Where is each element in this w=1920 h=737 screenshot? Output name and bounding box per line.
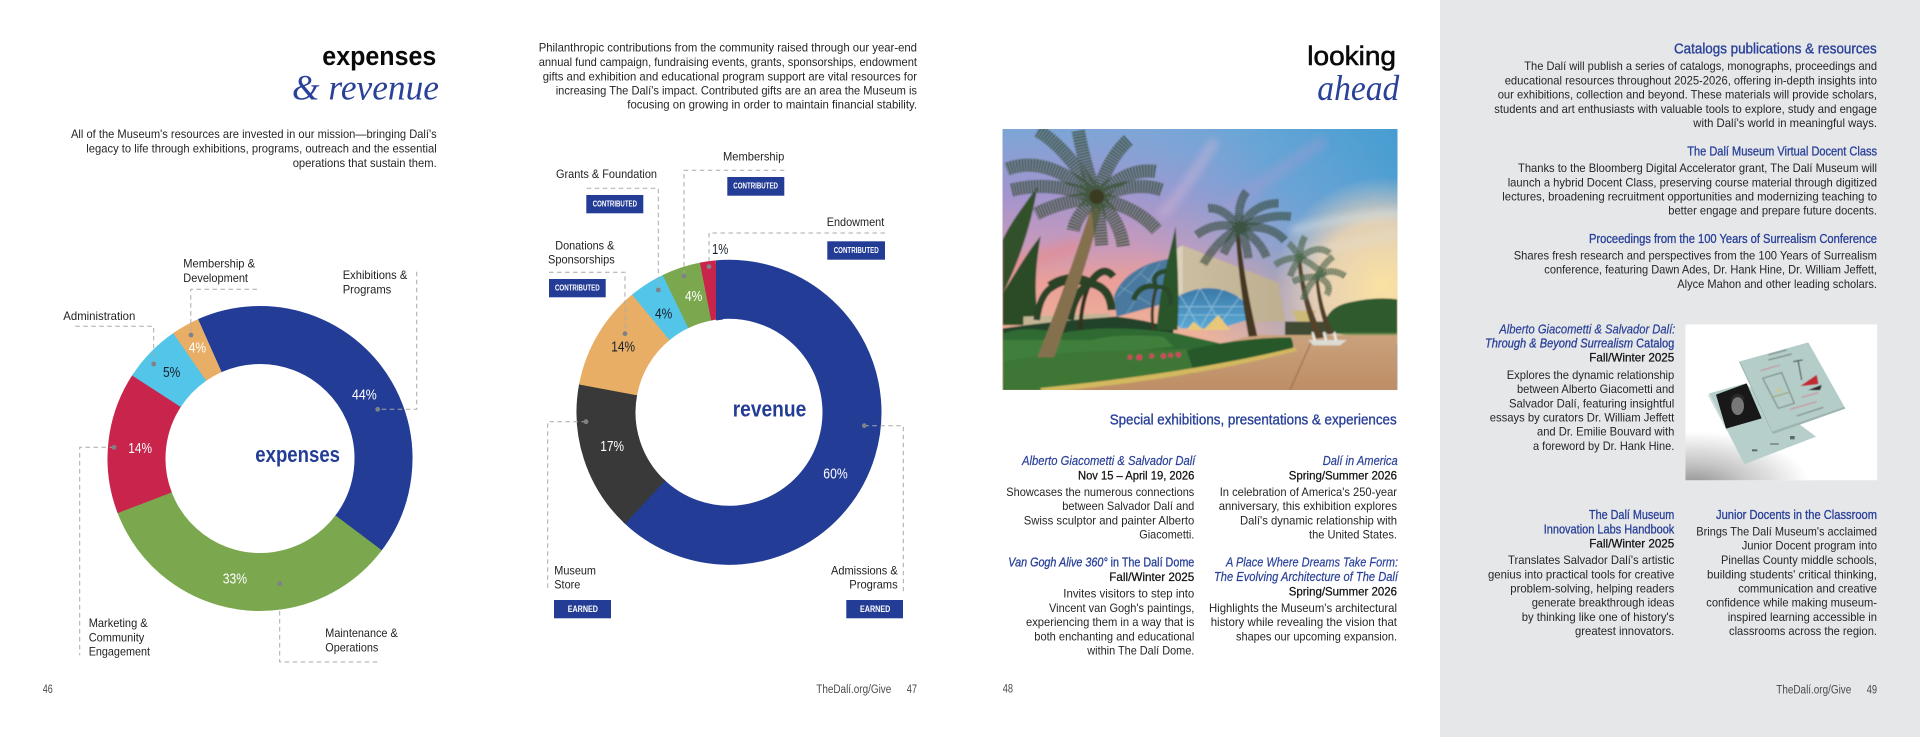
section: Giacometti catalog: Salvador Dalí, featuring insightful <box>1509 396 1674 410</box>
heading: special exhibitions: Special exhibitions, presentations & experiences <box>1110 412 1397 428</box>
exhibition: Alberto Giacometti & Salvador Dalí: Nov 15 – April 19, 2026 <box>1078 468 1195 482</box>
callout: Museum Store earned 17%: Store <box>554 578 581 592</box>
footer: TheDali.org/Give 47: TheDalí.org/Give <box>816 684 891 696</box>
callout: Grants & Foundation contributed 4%: 4% <box>655 306 672 323</box>
callout: Marketing & Community Engagement 14%: 14% <box>128 440 152 457</box>
section: Innovation Labs Handbook: problem-solving, helping readers <box>1510 582 1674 596</box>
section: virtual docent class: The Dalí Museum Virtual Docent Class <box>1687 144 1877 158</box>
heading: expenses & revenue: expenses <box>322 41 436 71</box>
section: Giacometti catalog: essays by curators Dr. William Jeffett <box>1490 411 1675 425</box>
callout: Membership & Development 4% <box>183 257 257 356</box>
section: virtual docent class: lectures, broadening recruitment opportunities and modernizing teaching to <box>1502 189 1877 203</box>
section: Innovation Labs Handbook: Innovation Labs Handbook <box>1544 522 1675 536</box>
callout: Admissions & Programs earned 60%: Programs <box>849 578 898 592</box>
exhibition: Van Gogh Alive 360°: Van Gogh Alive 360° in The Dalí Dome <box>1008 556 1194 570</box>
callout: Marketing & Community Engagement 14%: Community <box>89 630 144 644</box>
callout: Marketing & Community Engagement 14% <box>80 440 152 659</box>
text block: philanthropic contributions: Philanthropic contributions from the community raised through our year-end <box>539 41 917 55</box>
callout: Administration 5%: 5% <box>163 364 180 381</box>
exhibition: A Place Where Dreams Take Form: shapes our upcoming expansion. <box>1236 629 1397 643</box>
section: catalogs publications & resources: with Dalí's world in meaningful ways. <box>1692 116 1877 130</box>
section: Innovation Labs Handbook <box>1488 508 1675 638</box>
section: Junior Docents in the Classroom: Pinellas County middle schools, <box>1721 553 1877 567</box>
text block: expenses intro: All of the Museum's resources are invested in our mission—bringing Dalí's <box>71 127 437 141</box>
exhibition: Van Gogh Alive 360°: Invites visitors to step into <box>1063 587 1195 601</box>
exhibition: Dalí in America: anniversary, this exhibition explores <box>1219 499 1397 513</box>
section: proceedings conference: conference, featuring Dawn Ades, Dr. Hank Hine, Dr. William Jeffett, <box>1544 263 1877 277</box>
heading: expenses & revenue: & revenue <box>292 68 439 108</box>
section: Junior Docents in the Classroom: Junior Docent program into <box>1742 539 1877 553</box>
image: catalog book mockup <box>1685 324 1877 480</box>
section: Junior Docents in the Classroom: Brings The Dalí Museum's acclaimed <box>1696 525 1877 539</box>
section: Giacometti catalog: Fall/Winter 2025 <box>1589 351 1675 365</box>
exhibition: Alberto Giacometti & Salvador Dalí: Giacometti. <box>1139 527 1194 541</box>
callout: Admissions & Programs earned 60%: Admissions & <box>831 563 898 577</box>
callout: Donations & Sponsorships contributed 14%: Sponsorships <box>548 253 615 267</box>
text block: philanthropic contributions: annual fund campaign, fundraising events, grants, sponsorships, endowment <box>539 55 918 69</box>
section: Junior Docents in the Classroom: confidence while making museum- <box>1706 596 1877 610</box>
exhibition: A Place Where Dreams Take Form: Highlights the Museum's architectural <box>1209 601 1397 615</box>
donut chart: revenue <box>555 238 903 586</box>
exhibition: Dalí in America: Spring/Summer 2026 <box>1289 468 1397 482</box>
panel: grey background of page 49 <box>1440 0 1920 737</box>
callout: Donations & Sponsorships contributed 14%: Donations & <box>555 238 614 252</box>
exhibition: A Place Where Dreams Take Form: The Evolving Architecture of The Dalí <box>1214 570 1399 584</box>
section: catalogs publications & resources: our exhibitions, collection and beyond. These materials will provide scholars, <box>1498 88 1877 102</box>
section: proceedings conference <box>1514 232 1877 291</box>
footer: TheDali.org/Give 49: 49 <box>1867 684 1877 696</box>
callout: Marketing & Community Engagement 14%: Engagement <box>89 645 151 659</box>
callout: Admissions & Programs earned 60% <box>823 423 903 618</box>
donut chart: expenses <box>87 286 433 631</box>
callout: Museum Store earned 17% <box>548 419 624 618</box>
callout: Administration 5%: Administration <box>63 309 135 323</box>
callout: Membership contributed 4% <box>682 149 785 305</box>
section: Junior Docents in the Classroom: Junior Docents in the Classroom <box>1716 508 1877 522</box>
section: Innovation Labs Handbook: greatest innovators. <box>1575 624 1674 638</box>
callout: Membership contributed 4%: 4% <box>685 288 702 305</box>
callout: Admissions & Programs earned 60%: 60% <box>823 465 848 482</box>
exhibition: Van Gogh Alive 360°: both enchanting and educational <box>1034 629 1194 643</box>
section: Innovation Labs Handbook: The Dalí Museum <box>1589 508 1674 522</box>
section: catalogs publications & resources: Catalogs publications & resources <box>1674 41 1877 57</box>
section: catalogs publications & resources: students and art enthusiasts with valuable tools to explore, study and engage <box>1494 102 1877 116</box>
callout: Marketing & Community Engagement 14%: Marketing & <box>89 616 148 630</box>
callout: Maintenance & Operations 33% <box>223 571 398 662</box>
text block: philanthropic contributions: gifts and exhibition and educational program support are vital resources for <box>543 69 917 83</box>
callout: Exhibitions & Programs 44%: Exhibitions & <box>343 268 407 282</box>
callout: Endowment contributed 1%: CONTRIBUTED <box>834 246 879 255</box>
exhibition: Dalí in America: the United States. <box>1309 527 1397 541</box>
text block: expenses intro: legacy to life through exhibitions, programs, outreach and the essential <box>86 142 437 156</box>
callout: Museum Store earned 17%: Museum <box>554 563 596 577</box>
callout: Grants & Foundation contributed 4% <box>556 167 672 323</box>
callout: Grants & Foundation contributed 4%: CONTRIBUTED <box>593 200 637 209</box>
section: Innovation Labs Handbook: genius into practical tools for creative <box>1488 567 1675 581</box>
callout: Maintenance & Operations 33%: 33% <box>223 571 247 588</box>
section: Innovation Labs Handbook: Fall/Winter 2025 <box>1589 536 1675 550</box>
section: virtual docent class <box>1502 144 1877 218</box>
text block: expenses intro: operations that sustain them. <box>293 156 437 170</box>
callout: Donations & Sponsorships contributed 14% <box>548 238 635 355</box>
section: proceedings conference: Proceedings from the 100 Years of Surrealism Conference <box>1589 232 1877 246</box>
section: virtual docent class: launch a hybrid Docent Class, preserving course material through digitized <box>1508 175 1877 189</box>
page number 46: 46 <box>43 684 53 696</box>
callout: Membership & Development 4%: Development <box>183 271 249 285</box>
exhibition: Dalí in America <box>1219 454 1398 541</box>
section: Junior Docents in the Classroom: communication and creative <box>1738 582 1877 596</box>
section: Junior Docents in the Classroom: building students' critical thinking, <box>1707 567 1877 581</box>
section: virtual docent class: better engage and prepare future docents. <box>1668 204 1877 218</box>
callout: Membership & Development 4%: Membership & <box>183 257 255 271</box>
exhibition: Alberto Giacometti & Salvador Dalí: Swiss sculptor and painter Alberto <box>1024 513 1195 527</box>
section: proceedings conference: Alyce Mahon and other leading scholars. <box>1677 277 1877 291</box>
callout: Museum Store earned 17%: EARNED <box>568 604 598 615</box>
callout: Endowment contributed 1% <box>707 215 885 269</box>
heading: looking ahead: ahead <box>1317 68 1400 108</box>
panel: catalogs and resources page 49 <box>1485 41 1877 696</box>
section: Giacometti catalog: Through & Beyond Surrealism Catalog <box>1485 337 1674 351</box>
footer: TheDali.org/Give 47: 47 <box>907 684 917 696</box>
text block: philanthropic contributions <box>539 41 918 112</box>
section: Giacometti catalog <box>1485 322 1675 453</box>
section: virtual docent class: Thanks to the Bloomberg Digital Accelerator grant, The Dalí Museum will <box>1518 161 1877 175</box>
section: Giacometti catalog: Explores the dynamic relationship <box>1507 368 1675 382</box>
section: Giacometti catalog: Alberto Giacometti & Salvador Dalí: <box>1498 322 1675 336</box>
callout: Exhibitions & Programs 44%: Programs <box>343 282 391 296</box>
panel: expenses page 46 <box>43 41 439 696</box>
exhibition: Van Gogh Alive 360°: Vincent van Gogh's paintings, <box>1049 601 1194 615</box>
callout: Administration 5% <box>63 309 180 381</box>
section: catalogs publications & resources: The Dalí will publish a series of catalogs, monographs, proceedings and <box>1524 59 1877 73</box>
exhibition: A Place Where Dreams Take Form: A Place Where Dreams Take Form: <box>1225 556 1398 570</box>
exhibition: A Place Where Dreams Take Form <box>1209 556 1399 643</box>
text block: philanthropic contributions: focusing on growing in order to maintain financial stability. <box>627 98 917 112</box>
section: Innovation Labs Handbook: by thinking like one of history's <box>1522 610 1674 624</box>
heading: looking ahead <box>1307 41 1400 108</box>
section: catalogs publications & resources <box>1494 41 1877 130</box>
callout: Grants & Foundation contributed 4%: Grants & Foundation <box>556 167 657 181</box>
callout: Museum Store earned 17%: 17% <box>600 438 624 455</box>
section: Junior Docents in the Classroom: inspired learning accessible in <box>1728 610 1877 624</box>
callout: Maintenance & Operations 33%: Operations <box>325 640 378 654</box>
exhibition: Van Gogh Alive 360°: within The Dalí Dome. <box>1086 643 1194 657</box>
exhibition: Dalí in America: In celebration of America's 250-year <box>1220 485 1397 499</box>
callout: Donations & Sponsorships contributed 14%: CONTRIBUTED <box>555 284 600 293</box>
callout: Donations & Sponsorships contributed 14%: 14% <box>611 338 635 355</box>
exhibition: Van Gogh Alive 360°: experiencing them in a way that is <box>1026 615 1194 629</box>
section: proceedings conference: Shares fresh research and perspectives from the 100 Years of Surrealism <box>1514 249 1877 263</box>
callout: Endowment contributed 1%: Endowment <box>827 215 885 229</box>
center label: expenses: expenses <box>255 442 340 467</box>
panel: looking ahead page 48 <box>999 41 1401 696</box>
page number 48: 48 <box>1003 684 1013 696</box>
section: Junior Docents in the Classroom: classrooms across the region. <box>1729 624 1877 638</box>
photo: The Dalí Museum building with palms at sunset <box>999 126 1401 393</box>
exhibition: Alberto Giacometti & Salvador Dalí: Alberto Giacometti & Salvador Dalí <box>1021 454 1197 468</box>
callout: Exhibitions & Programs 44% <box>343 268 417 412</box>
heading: expenses & revenue <box>292 41 439 108</box>
footer: TheDali.org/Give 49: TheDalí.org/Give <box>1776 684 1851 696</box>
heading: looking ahead: looking <box>1307 41 1396 71</box>
center label: revenue: revenue <box>733 397 806 422</box>
callout: Exhibitions & Programs 44%: 44% <box>352 387 377 404</box>
section: Junior Docents in the Classroom <box>1696 508 1877 638</box>
text block: philanthropic contributions: increasing The Dalí's impact. Contributed gifts are an area the Museum is <box>556 84 917 98</box>
section: Giacometti catalog: between Alberto Giacometti and <box>1517 382 1674 396</box>
exhibition: Alberto Giacometti & Salvador Dalí <box>1006 454 1197 541</box>
callout: Maintenance & Operations 33%: Maintenance & <box>325 626 398 640</box>
callout: Admissions & Programs earned 60%: EARNED <box>860 604 890 615</box>
exhibition: Van Gogh Alive 360°: Fall/Winter 2025 <box>1109 570 1195 584</box>
callout: Membership & Development 4%: 4% <box>189 339 206 356</box>
callout: Membership contributed 4%: CONTRIBUTED <box>733 182 778 191</box>
exhibition: A Place Where Dreams Take Form: history while revealing the vision that <box>1211 615 1398 629</box>
exhibition: Van Gogh Alive 360° <box>1008 556 1195 657</box>
section: catalogs publications & resources: educational resources throughout 2025-2026, offering in-depth insights into <box>1505 73 1877 87</box>
panel: revenue page 47 <box>539 41 918 696</box>
section: Giacometti catalog: and Dr. Emilie Bouvard with <box>1537 425 1674 439</box>
exhibition: A Place Where Dreams Take Form: Spring/Summer 2026 <box>1289 584 1397 598</box>
section: Innovation Labs Handbook: Translates Salvador Dalí's artistic <box>1508 553 1674 567</box>
text block: expenses intro <box>71 127 437 170</box>
exhibition: Alberto Giacometti & Salvador Dalí: between Salvador Dalí and <box>1062 499 1194 513</box>
exhibition: Alberto Giacometti & Salvador Dalí: Showcases the numerous connections <box>1006 485 1194 499</box>
callout: Membership contributed 4%: Membership <box>723 149 785 163</box>
section: Giacometti catalog: a foreword by Dr. Hank Hine. <box>1533 439 1674 453</box>
exhibition: Dalí in America: Dalí's dynamic relationship with <box>1240 513 1397 527</box>
callout: Endowment contributed 1%: 1% <box>712 241 728 258</box>
exhibition: Dalí in America: Dalí in America <box>1323 454 1398 468</box>
section: Innovation Labs Handbook: generate breakthrough ideas <box>1532 596 1674 610</box>
